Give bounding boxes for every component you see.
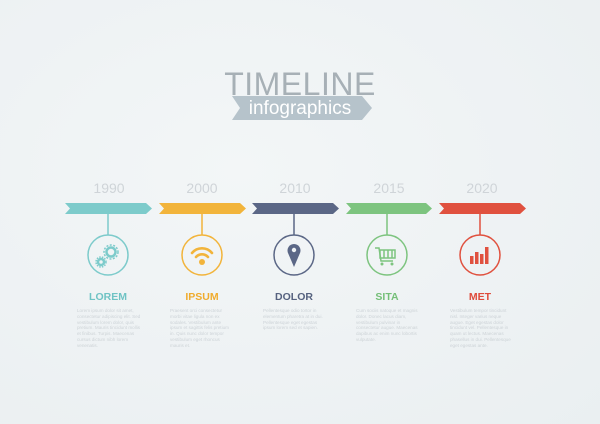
text: Praesent orci consectetur morbi vitae ligula non ex sodales. Vestibulum ante ipsum et sagittis felis pretium in. Quis nunc dolor tempor vestibulum eget rhoncus mauris et. <box>170 308 229 348</box>
subtitle ribbon <box>232 96 372 120</box>
step 3 marker <box>252 203 339 275</box>
step 4 marker <box>346 203 432 275</box>
text: MET <box>469 291 491 303</box>
step 5 marker <box>439 203 526 275</box>
text: 2020 <box>466 180 498 196</box>
icon: map pin <box>288 244 300 267</box>
text: 2015 <box>373 180 405 196</box>
years: 1990 <box>93 180 125 196</box>
icon: wifi <box>192 248 212 257</box>
text: IPSUM <box>185 291 219 303</box>
text blocks: Lorem ipsum dolor sit amet, consectetur adipiscing elit. Sed vestibulum lorem dolor, quis pretium. Mauris tincidunt mollis et finibus. Turpis. Maecenas cursus dictum nibh lorem venenatis. <box>77 308 140 348</box>
icon: cart <box>375 248 395 261</box>
text: 2010 <box>279 180 311 196</box>
labels: LOREM <box>89 291 127 303</box>
subtitle ribbon: infographics <box>249 98 351 119</box>
title <box>224 66 376 120</box>
title text: TIMELINE <box>224 66 376 102</box>
text: 2000 <box>186 180 218 196</box>
step 1 marker <box>65 203 152 275</box>
step 2 marker <box>159 203 246 275</box>
text: Pellentesque odio tortor in elementum pharetra at in dui. Pellentesque eget egestas ipsum lorem sed et sapien. <box>263 308 323 330</box>
text: Cum sociis natoque et magnis dolor. Donec lacus diam, vestibulum pulvinar in consectetur augue. Maecenas dapibus ac enim nunc lobortis vulputate. <box>356 308 418 342</box>
icon: gears <box>98 248 116 265</box>
text: SITA <box>375 291 399 303</box>
text: Vestibulum tempor tincidunt nisl. Integer varius neque augue. Eget egestas dolor tincidunt vel. Pellentesque in quam ut lectus. Maecenas phasellus in dui. Pellentesque eget egestas ante. <box>450 308 511 348</box>
icon: bar chart <box>470 247 488 264</box>
text: DOLOR <box>275 291 313 303</box>
